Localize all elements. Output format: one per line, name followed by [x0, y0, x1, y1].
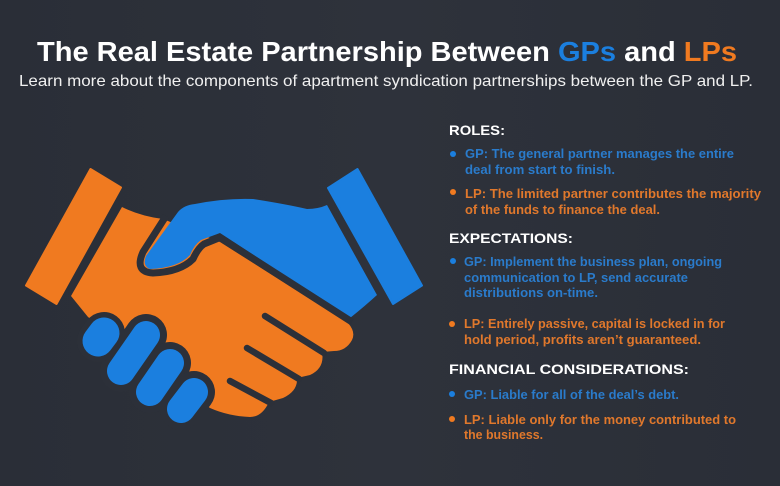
- subtitle: Learn more about the components of apartment syndication partnerships between the GP and LP.: [19, 73, 753, 90]
- GP expectations: GP: Implement the business plan, ongoing: [464, 254, 722, 269]
- LP expectations: [449, 316, 725, 347]
- GP expectations: distributions on-time.: [464, 285, 598, 300]
- LP expectations: hold period, profits aren’t guaranteed.: [464, 332, 701, 347]
- panel: expectations: [449, 230, 725, 347]
- icon: handshake: [26, 169, 422, 417]
- orange hand: [71, 207, 353, 417]
- title: The Real Estate Partnership Between GPs and LPs: [37, 36, 737, 67]
- LP role: of the funds to finance the deal.: [465, 202, 660, 217]
- GP role: deal from start to finish.: [465, 162, 615, 177]
- LP role: [450, 186, 762, 217]
- orange cuff: [26, 169, 121, 304]
- GP role: [450, 146, 734, 177]
- LP financial: LP: Liable only for the money contributed to: [464, 412, 736, 427]
- finger gaps: [230, 316, 324, 403]
- LP financial: the business.: [464, 427, 543, 442]
- blue hand: [145, 199, 377, 318]
- GP expectations: [450, 254, 722, 300]
- panel: roles: [449, 122, 762, 217]
- heading: ROLES:: [449, 122, 505, 138]
- GP financial: GP: Liable for all of the deal’s debt.: [464, 387, 679, 402]
- thumb outline: [140, 216, 352, 322]
- LP expectations: LP: Entirely passive, capital is locked in for: [464, 316, 725, 331]
- heading: EXPECTATIONS:: [449, 230, 573, 246]
- panel: financial considerations: [449, 361, 736, 442]
- LP role: LP: The limited partner contributes the majority: [465, 186, 762, 201]
- GP expectations: communication to LP, send accurate: [464, 270, 688, 285]
- heading: FINANCIAL CONSIDERATIONS:: [449, 361, 689, 377]
- blue cuff: [328, 169, 422, 304]
- blue fingers: [98, 333, 194, 409]
- GP role: GP: The general partner manages the entire: [465, 146, 734, 161]
- LP financial: [449, 412, 736, 442]
